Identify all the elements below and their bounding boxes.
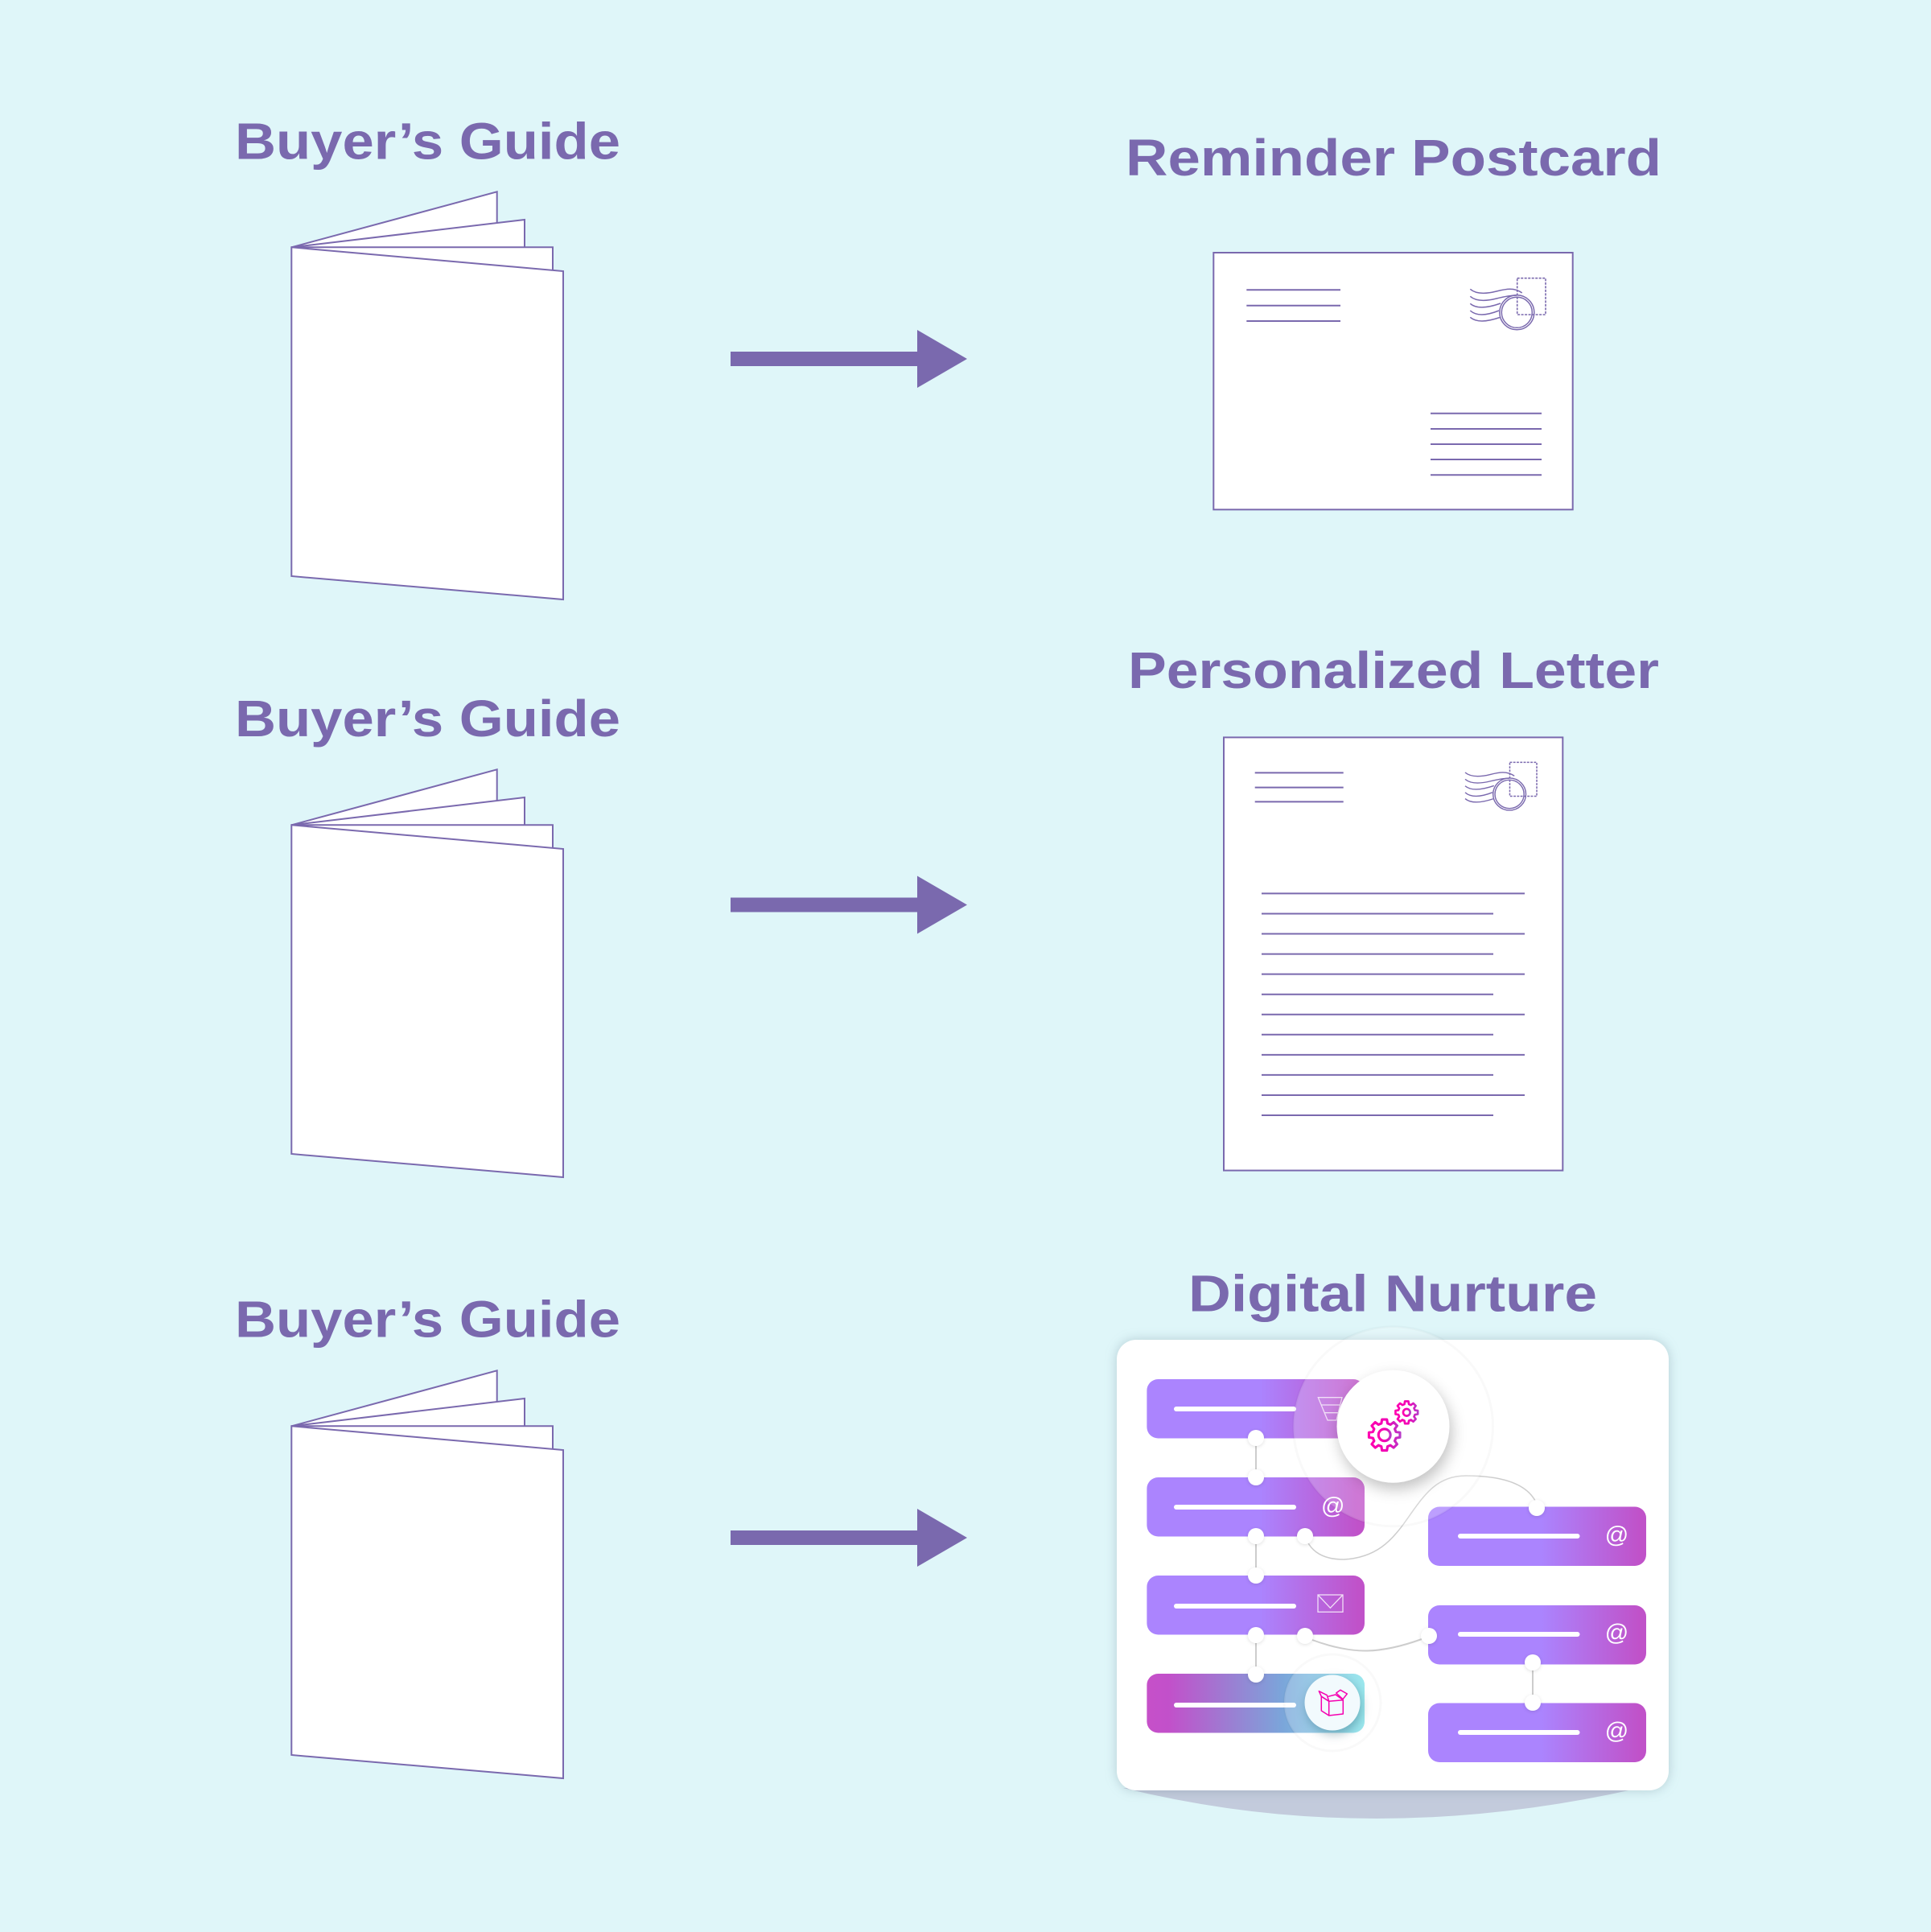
icon: large gear [1369,1419,1400,1451]
icon: envelope [1318,1595,1343,1612]
icon: small gear [1395,1401,1418,1423]
title: Buyer's Guide 3: Buyer’s Guide [235,1291,620,1349]
panel: letter [1224,737,1563,1171]
title: Reminder Postcard: Reminder Postcard [1126,129,1661,187]
panel: digital nurture workflow [1117,1327,1669,1819]
icon: funnel [1318,1398,1342,1420]
icon: stamp and postmark [1470,278,1546,330]
right step 1 [1428,1506,1646,1566]
return address lines [1246,290,1340,321]
icon: at sign: @ [1605,1719,1628,1745]
step 4: package [1147,1674,1365,1733]
title: Buyer's Guide 2: Buyer’s Guide [235,690,620,748]
panel: postcard [1213,253,1573,509]
card ground shadow [1123,1788,1640,1819]
workflow card [1117,1340,1669,1790]
icon: at sign: @ [1605,1522,1628,1548]
arrow 1 [731,330,967,388]
package badge [1284,1654,1381,1751]
step 3: mail [1147,1576,1365,1635]
step 1: funnel [1147,1379,1365,1439]
letter header lines [1255,772,1344,801]
icon: open box [1319,1690,1347,1716]
automation gears badge [1294,1327,1493,1526]
right step 3 [1428,1703,1646,1762]
icon: letter stamp and postmark [1465,762,1537,810]
arrow 3 [731,1509,967,1567]
arrow 2 [731,875,967,933]
title: Personalized Letter: Personalized Letter [1128,641,1659,699]
connectors [1256,1438,1535,1703]
icon: at sign: @ [1321,1493,1344,1519]
right step 2 [1428,1605,1646,1664]
connector nodes [1248,1430,1545,1711]
step 2: email [1147,1477,1365,1537]
icon: booklet 3 [291,1370,563,1778]
recipient address lines [1431,414,1542,475]
title: Buyer's Guide 1: Buyer’s Guide [235,112,620,170]
title: Digital Nurture: Digital Nurture [1188,1265,1597,1323]
icon: booklet 1 [291,192,563,599]
letter body lines [1262,893,1525,1115]
icon: booklet 2 [291,769,563,1177]
icon: at sign: @ [1605,1621,1628,1646]
